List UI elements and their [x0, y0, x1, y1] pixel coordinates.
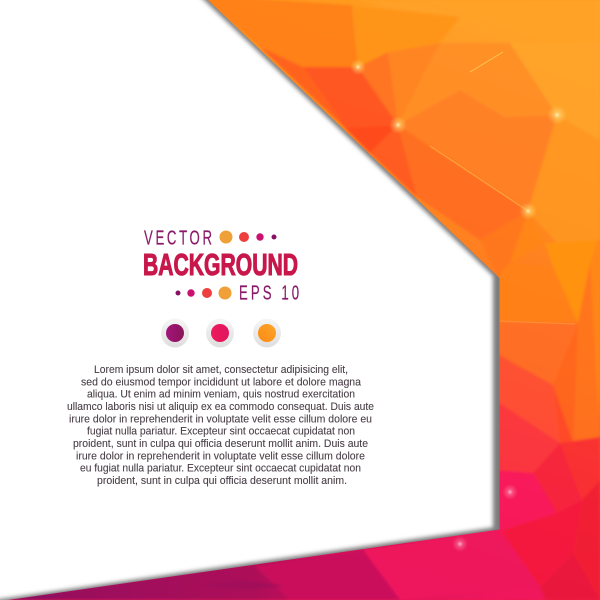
- word: EPS 10: EPS 10: [239, 282, 299, 304]
- body text: fugiat nulla pariatur. Excepteur sint occaecat cupidatat non: [87, 426, 355, 438]
- word: VECTOR: VECTOR: [144, 227, 212, 249]
- heading block: [143, 227, 299, 304]
- body text: aliqua. Ut enim ad minim veniam, quis nostrud exercitation: [87, 389, 355, 401]
- body text: eu fugiat nulla pariatur. Excepteur sint occaecat cupidatat non: [80, 463, 361, 475]
- button: orange: [253, 318, 281, 348]
- body text: sed do eiusmod tempor incididunt ut labore et dolore magna: [81, 376, 361, 388]
- body text: [67, 364, 374, 487]
- body text: proident, sunt in culpa qui officia deserunt mollit anim. Duis aute: [73, 438, 368, 450]
- bottom dots: [176, 286, 232, 300]
- body text: proident, sunt in culpa qui officia deserunt mollit anim.: [97, 475, 347, 487]
- button: pink: [206, 318, 234, 348]
- body text: ullamco laboris nisi ut aliquip ex ea commodo consequat. Duis aute: [67, 401, 374, 413]
- colour buttons: [161, 318, 281, 348]
- word: BACKGROUND: BACKGROUND: [143, 247, 298, 282]
- light streaks: [470, 52, 503, 72]
- body text: irure dolor in reprehenderit in voluptate velit esse cillum dolore: [76, 450, 365, 462]
- top dots: [220, 230, 276, 244]
- body text: Lorem ipsum dolor sit amet, consectetur adipisicing elit,: [94, 364, 348, 376]
- button: purple: [161, 318, 189, 348]
- body text: irure dolor in reprehenderit in voluptate velit esse cillum dolore eu: [69, 413, 372, 425]
